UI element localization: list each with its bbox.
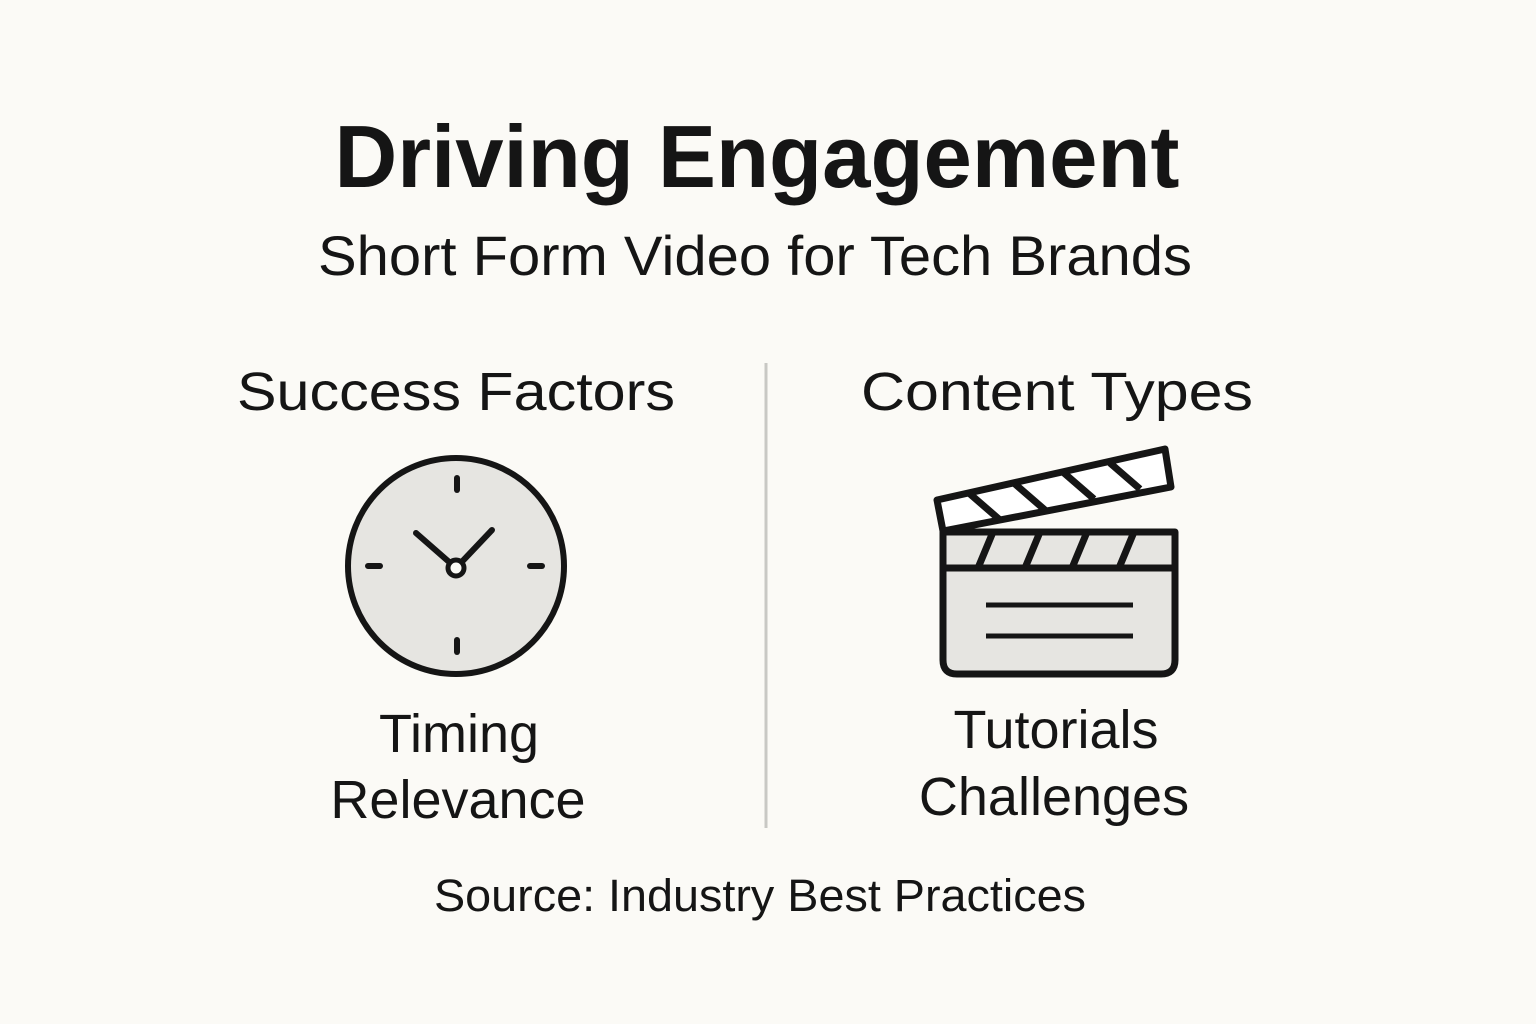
heading: success factors: Success Factors (237, 362, 675, 422)
divider (764, 363, 768, 828)
panel: success factors: Relevance (330, 770, 586, 830)
panel: success factors (237, 362, 675, 830)
list: content types: Tutorials (953, 700, 1159, 760)
title: Driving Engagement (334, 107, 1180, 206)
heading: content types: Content Types (861, 362, 1253, 422)
subtitle: Short Form Video for Tech Brands (318, 224, 1192, 287)
source note: Source: Industry Best Practices (434, 870, 1086, 921)
icon: clapperboard (937, 449, 1175, 674)
panel: content types: Challenges (919, 767, 1189, 827)
list: success factors: Timing (379, 704, 539, 764)
panel: content types (861, 362, 1253, 827)
icon: clock (348, 458, 564, 674)
